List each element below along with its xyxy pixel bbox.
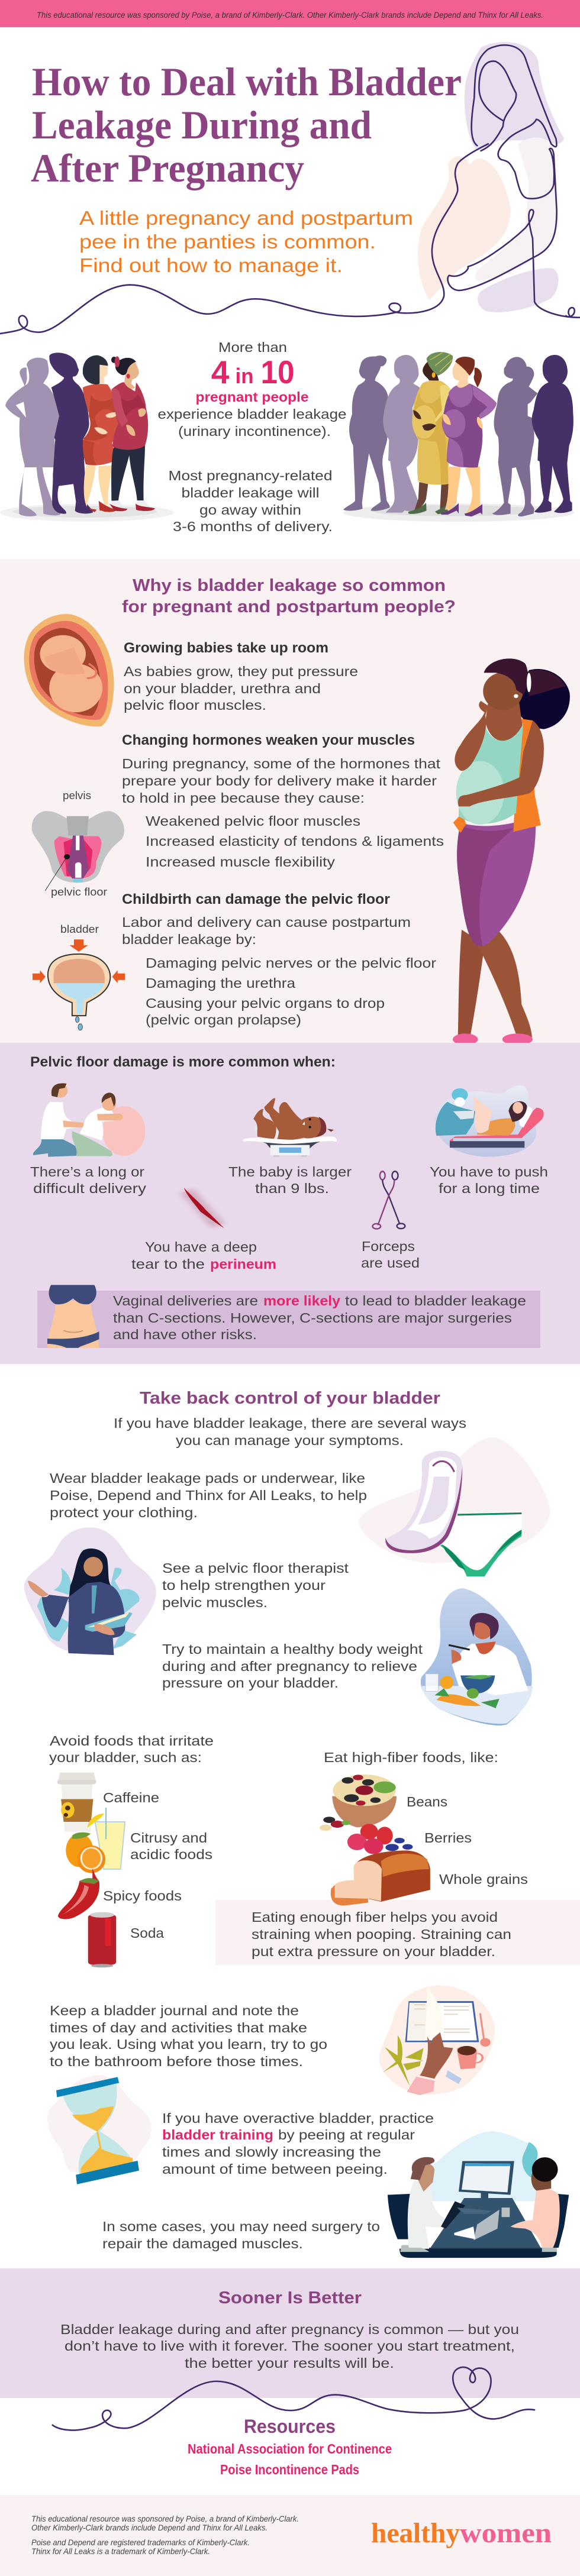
statistic: 4 in 10 pregnant people: 10 [260, 354, 295, 390]
text: forceps are used [361, 1239, 420, 1271]
statistic: 4 in 10 pregnant people: pregnant people [195, 389, 309, 405]
subtitle: A little pregnancy and postpartum [79, 207, 413, 229]
text: wear pads or underwear: protect your clothing. [50, 1505, 198, 1520]
text: callout copy: to lead to bladder leakage [345, 1293, 526, 1308]
text: callout copy: Vaginal deliveries are [113, 1293, 258, 1308]
text: several ways intro [114, 1415, 466, 1448]
text: eat high-fiber foods: Eat high-fiber foods, like: [324, 1750, 498, 1765]
callout: fiber box: Eating enough fiber helps you avoid [252, 1909, 498, 1925]
panel: sooner is better: the better your results will be. [185, 2355, 394, 2371]
panel: sooner is better [0, 2268, 580, 2398]
statistic: 4 in 10 pregnant people [157, 340, 347, 534]
text block: childbirth: Damaging the urethra [146, 975, 295, 991]
text: callout copy [113, 1293, 526, 1342]
icon: C-section belly [47, 1285, 99, 1348]
text: irritating foods list: Soda [130, 1925, 164, 1941]
heading: why is bladder leakage so common: Why is bladder leakage so common [133, 576, 446, 595]
footer disclaimer: Poise and Depend are registered trademarks of Kimberly-Clark. [31, 2538, 250, 2547]
text: healthy body weight [162, 1641, 423, 1691]
text: bladder journal [50, 2003, 327, 2069]
footer [0, 2495, 580, 2576]
subtitle [79, 207, 413, 276]
icon: berries [347, 1824, 413, 1854]
text: surgery [102, 2219, 380, 2251]
text: long or difficult delivery: difficult delivery [33, 1181, 147, 1196]
title: How to Deal with Bladder [32, 59, 462, 104]
text: several ways intro: you can manage your symptoms. [176, 1433, 404, 1448]
statistic: 4 in 10 pregnant people: bladder leakage will [181, 485, 320, 500]
text: push for a long time: You have to push [430, 1164, 548, 1179]
illustration: left group of pregnant people [0, 353, 173, 522]
footer disclaimer: Other Kimberly-Clark brands include Depend and Thinx for All Leaks. [31, 2523, 268, 2532]
callout: vaginal deliveries and C-sections [37, 1285, 540, 1348]
text block: growing babies: Growing babies take up room [124, 640, 328, 656]
footer disclaimer: This educational resource was sponsored by Poise, a brand of Kimberly-Clark. [31, 2514, 299, 2523]
text: push for a long time: for a long time [439, 1181, 540, 1196]
title: After Pregnancy [31, 146, 304, 190]
text block: growing babies: on your bladder, urethra and [124, 681, 321, 696]
heading: why is bladder leakage so common: for pregnant and postpartum people? [122, 597, 456, 616]
statistic: 4 in 10 pregnant people: (urinary incontinence). [178, 424, 331, 439]
callout: fiber box: straining when pooping. Straining can [252, 1927, 511, 1942]
statistic: 4 in 10 pregnant people: More than [218, 340, 287, 355]
text: pelvic floor therapist: pelvic muscles. [162, 1595, 268, 1610]
icon: coffee cup [57, 1773, 96, 1832]
footer disclaimer [31, 2514, 299, 2556]
callout: fiber box: put extra pressure on your bladder. [252, 1944, 495, 1959]
text: baby larger than 9 lbs: The baby is larger [228, 1164, 352, 1179]
illustration: pregnant woman laughing [453, 658, 570, 1045]
text block: changing hormones: Weakened pelvic floor muscles [146, 813, 360, 829]
text: long or difficult delivery [30, 1164, 147, 1196]
sponsor banner [0, 0, 580, 27]
illustration: line drawing of pregnant woman [0, 42, 580, 334]
statistic: 4 in 10 pregnant people: Most pregnancy-related [168, 468, 333, 483]
text: forceps are used: are used [361, 1255, 420, 1271]
text block: changing hormones [122, 732, 444, 870]
subtitle: pee in the panties is common. [79, 231, 376, 253]
text block: changing hormones: prepare your body for delivery make it harder [122, 773, 437, 788]
subtitle: Find out how to manage it. [79, 254, 343, 276]
text: bladder training: amount of time between peeing. [162, 2161, 388, 2177]
text: deep tear to the perineum: You have a deep [145, 1239, 257, 1255]
illustration: hourglass [47, 2075, 152, 2184]
illustration: pelvic floor therapist [24, 1527, 156, 1655]
resources: National Association for Continence [188, 2441, 392, 2457]
text: wear pads or underwear: Poise, Depend and Thinx for All Leaks, to help [50, 1488, 367, 1503]
panel: why is bladder leakage so common [0, 559, 580, 1045]
text: irritating foods list: acidic foods [130, 1847, 212, 1862]
icon: fetus in uterus [24, 614, 114, 726]
illustration: bladder journal [379, 1985, 495, 2095]
title: Leakage During and [32, 102, 372, 147]
icon: chili pepper [58, 1868, 99, 1919]
text block: childbirth: Damaging pelvic nerves or the pelvic floor [146, 955, 436, 971]
logo: healthywomen: healthy [371, 2517, 460, 2549]
text: bladder journal: you leak. Using what you learn, try to go [50, 2037, 327, 2052]
text: bladder training: If you have overactive bladder, practice [162, 2110, 434, 2126]
text: callout copy: more likely [263, 1293, 340, 1308]
text: deep tear to the perineum: perineum [210, 1256, 276, 1272]
text: bladder journal: to the bathroom before those times. [50, 2054, 303, 2069]
heading: why is bladder leakage so common [122, 576, 456, 616]
text block: changing hormones: Increased muscle flexibility [146, 854, 336, 870]
callout: fiber box [215, 1900, 580, 1965]
text: several ways intro: If you have bladder leakage, there are several ways [114, 1415, 466, 1431]
icon: perineal tear [184, 1188, 224, 1228]
logo: healthywomen: women [460, 2517, 552, 2549]
text: deep tear to the perineum: tear to the [131, 1256, 205, 1272]
text: avoid foods that irritate: Avoid foods that irritate [50, 1733, 214, 1748]
text: wear pads or underwear: Wear bladder leakage pads or underwear, like [50, 1470, 365, 1486]
text: high-fiber foods list [407, 1794, 528, 1887]
text: irritating foods list [103, 1790, 212, 1941]
text: avoid foods that irritate: your bladder, such as: [49, 1750, 202, 1765]
text: bladder training: bladder training [162, 2127, 273, 2142]
footer disclaimer: Thinx for All Leaks is a trademark of Kimberly-Clark. [31, 2546, 210, 2556]
text: forceps are used: Forceps [362, 1239, 415, 1254]
text: bladder training: by peeing at regular [278, 2127, 415, 2142]
text: surgery: In some cases, you may need surgery to [102, 2219, 380, 2234]
text block: growing babies: As babies grow, they put pressure [124, 664, 358, 679]
title [31, 59, 462, 190]
panel: pelvic floor damage [0, 1043, 580, 1364]
icons: irritating foods [57, 1773, 125, 1967]
illustration: pushing in delivery chair [435, 1085, 544, 1157]
text block: childbirth: bladder leakage by: [122, 932, 256, 947]
text: deep tear to the perineum [131, 1239, 276, 1272]
icon: bladder diagram: bladder [60, 923, 99, 935]
heading: take back control: Take back control of your bladder [140, 1389, 440, 1408]
icon: forceps [372, 1171, 405, 1229]
text block: childbirth: (pelvic organ prolapse) [146, 1012, 301, 1027]
text: bladder training: times and slowly increasing the [162, 2144, 381, 2160]
illustration: doctor consultation [388, 2131, 569, 2258]
heading: pelvic floor damage: Pelvic floor damage is more common when: [30, 1054, 336, 1070]
text: callout copy: and have other risks. [113, 1327, 257, 1342]
text block: changing hormones: Increased elasticity of tendons & ligaments [146, 833, 444, 849]
icon: pelvis diagram [32, 790, 124, 898]
text block: changing hormones: Changing hormones weaken your muscles [122, 732, 415, 748]
text: push for a long time [430, 1164, 548, 1196]
text block: childbirth [122, 891, 436, 1027]
icon: pelvis diagram: pelvis [63, 790, 91, 801]
icon: pelvis diagram: pelvic floor [51, 886, 107, 898]
panel: sooner is better: Sooner Is Better [218, 2289, 362, 2307]
statistic: 4 in 10 pregnant people: 4 [211, 354, 230, 390]
resources [188, 2416, 392, 2477]
text: bladder training [162, 2110, 434, 2177]
text: high-fiber foods list: Berries [424, 1830, 472, 1845]
text: irritating foods list: Caffeine [103, 1790, 159, 1805]
text block: changing hormones: During pregnancy, some of the hormones that [122, 756, 441, 771]
text: baby larger than 9 lbs: than 9 lbs. [255, 1181, 329, 1196]
logo: healthywomen [371, 2517, 552, 2549]
text: long or difficult delivery: There’s a long or [30, 1164, 144, 1179]
icon: bladder diagram [33, 923, 125, 1030]
statistic: 4 in 10 pregnant people: go away within [199, 502, 301, 518]
icons: high-fiber foods [320, 1775, 430, 1906]
illustration: couple with birthing ball [33, 1083, 146, 1157]
text: irritating foods list: Spicy foods [103, 1888, 182, 1903]
text block: childbirth: Labor and delivery can cause postpartum [122, 914, 411, 930]
text: pelvic floor therapist: See a pelvic floor therapist [162, 1560, 349, 1576]
resources: Poise Incontinence Pads [220, 2462, 359, 2477]
text: wear pads or underwear [50, 1470, 367, 1520]
text: healthy body weight: pressure on your bladder. [162, 1675, 339, 1691]
illustration: baby on scale [243, 1098, 337, 1157]
statistic: 4 in 10 pregnant people: 3-6 months of delivery. [173, 519, 333, 534]
text: healthy body weight: during and after pregnancy to relieve [162, 1659, 417, 1674]
panel: sooner is better: Bladder leakage during and after pregnancy is common — but you [60, 2322, 519, 2337]
text block: growing babies: pelvic floor muscles. [124, 697, 266, 713]
decorative line with heart [53, 2367, 534, 2430]
text: bladder journal: times of day and activities that make [50, 2020, 307, 2035]
text block: changing hormones: to hold in pee because they cause: [122, 790, 365, 806]
text: irritating foods list: Citrusy and [130, 1830, 207, 1845]
resources: Resources [244, 2416, 336, 2437]
icon: bowl of beans [320, 1775, 397, 1831]
text block: growing babies [124, 640, 358, 713]
text: callout copy: than C-sections. However, C-sections are major surgeries [113, 1310, 512, 1326]
text: pelvic floor therapist: to help strengthen your [162, 1578, 326, 1593]
text: pelvic floor therapist [162, 1560, 349, 1610]
text: high-fiber foods list: Beans [407, 1794, 447, 1809]
panel: sooner is better: don’t have to live with it forever. The sooner you start treatment, [65, 2338, 515, 2354]
text: avoid foods that irritate [49, 1733, 214, 1765]
sponsor banner: This educational resource was sponsored by Poise, a brand of Kimberly-Clark. Other Kimberly-Clark brands include Depend and Thinx for All Leaks. [37, 11, 543, 20]
statistic: 4 in 10 pregnant people: experience bladder leakage [157, 406, 347, 422]
text: baby larger than 9 lbs [228, 1164, 352, 1196]
text: bladder journal: Keep a bladder journal and note the [50, 2003, 299, 2018]
illustration: woman eating healthy food [421, 1588, 533, 1725]
icon: citrus drink and orange [66, 1808, 125, 1873]
icon: loaf of bread [331, 1850, 430, 1906]
illustration: pad and underwear [359, 1437, 550, 1576]
icon: soda can [88, 1912, 116, 1967]
text block: childbirth: Causing your pelvic organs to drop [146, 996, 385, 1011]
text: surgery: repair the damaged muscles. [102, 2236, 303, 2251]
text: healthy body weight: Try to maintain a healthy body weight [162, 1641, 423, 1657]
statistic: 4 in 10 pregnant people: in [236, 364, 253, 388]
text block: childbirth: Childbirth can damage the pelvic floor [122, 891, 390, 907]
illustration: right group of pregnant people [343, 352, 574, 522]
text: high-fiber foods list: Whole grains [439, 1872, 528, 1887]
